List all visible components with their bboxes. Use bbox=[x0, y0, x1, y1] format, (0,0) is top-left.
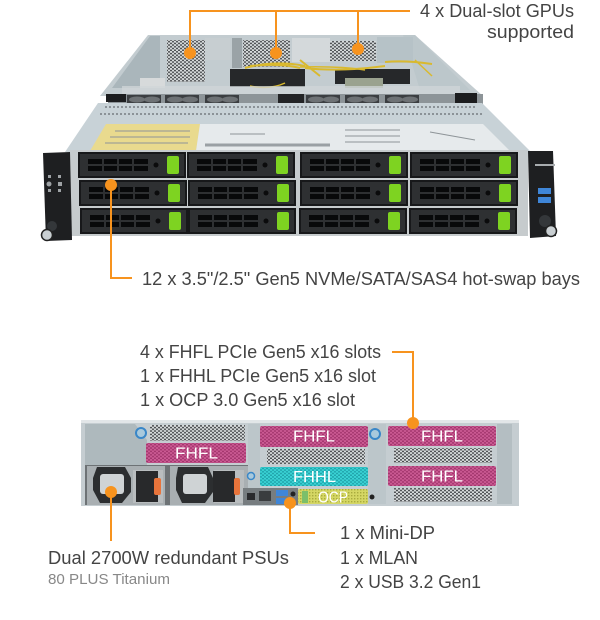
fan row bbox=[106, 93, 483, 104]
slot: FHFL center: FHFL bbox=[293, 428, 335, 446]
slot: OCP bbox=[298, 489, 368, 506]
text: PCIe slots: 4 x FHFL PCIe Gen5 x16 slots bbox=[140, 341, 381, 362]
callout: PCIe leader bbox=[392, 352, 419, 429]
drive bays bbox=[78, 152, 518, 234]
text: PSU: 80 PLUS Titanium bbox=[48, 571, 170, 588]
slot: FHFL right bottom: FHFL bbox=[421, 468, 463, 486]
text: GPUs supported: 4 x Dual-slot GPUs bbox=[420, 0, 574, 21]
callout: GPU leader lines bbox=[184, 11, 410, 59]
vent top left bbox=[150, 425, 245, 441]
right ear bbox=[528, 151, 556, 238]
text: GPUs supported: supported bbox=[487, 21, 574, 42]
slot: FHFL right top bbox=[388, 426, 496, 446]
warning label yellow bbox=[90, 124, 200, 151]
slot: FHFL center bbox=[260, 426, 368, 447]
text: IO bbox=[340, 522, 481, 592]
text: GPUs supported bbox=[420, 0, 574, 42]
text: bays: 12 x 3.5"/2.5" Gen5 NVMe/SATA/SAS4 hot-swap bays bbox=[142, 268, 580, 289]
slot: OCP: OCP bbox=[318, 490, 348, 506]
text: IO: 2 x USB 3.2 Gen1 bbox=[340, 571, 481, 592]
text: PSU bbox=[48, 547, 289, 588]
chassis interior bbox=[100, 35, 483, 96]
rear server chassis bbox=[81, 420, 519, 506]
top cover panel bbox=[65, 103, 531, 152]
callout: drive bays leader bbox=[105, 179, 132, 278]
text: IO: 1 x Mini-DP bbox=[340, 522, 435, 543]
top server chassis bbox=[65, 35, 531, 152]
instruction label white bbox=[196, 124, 510, 151]
blue latch right bbox=[370, 429, 380, 439]
slot: FHFL right top: FHFL bbox=[421, 428, 463, 446]
PSU 2 bbox=[170, 466, 248, 505]
front drive cage bbox=[42, 150, 556, 241]
slot: FHHL bbox=[260, 467, 368, 486]
text: PCIe slots: 1 x FHHL PCIe Gen5 x16 slot bbox=[140, 365, 376, 386]
callout: PSU leader bbox=[105, 486, 117, 541]
left metal plate bbox=[85, 424, 147, 465]
blue latch left bbox=[136, 428, 146, 438]
text: PCIe slots: 1 x OCP 3.0 Gen5 x16 slot bbox=[140, 389, 355, 410]
left ear bbox=[42, 152, 72, 241]
text: PSU: Dual 2700W redundant PSUs bbox=[48, 547, 289, 568]
rear IO ports bbox=[243, 488, 298, 505]
text: PCIe slots bbox=[140, 341, 381, 410]
text: IO: 1 x MLAN bbox=[340, 547, 418, 568]
slot: FHHL: FHHL bbox=[293, 469, 336, 486]
blue latch center bbox=[248, 472, 254, 480]
slot: FHFL left: FHFL bbox=[175, 446, 218, 462]
slot: FHFL left bbox=[146, 443, 246, 463]
callout: IO leader bbox=[284, 497, 315, 533]
PSU 1 bbox=[87, 466, 165, 505]
slot: FHFL right bottom bbox=[388, 466, 496, 486]
